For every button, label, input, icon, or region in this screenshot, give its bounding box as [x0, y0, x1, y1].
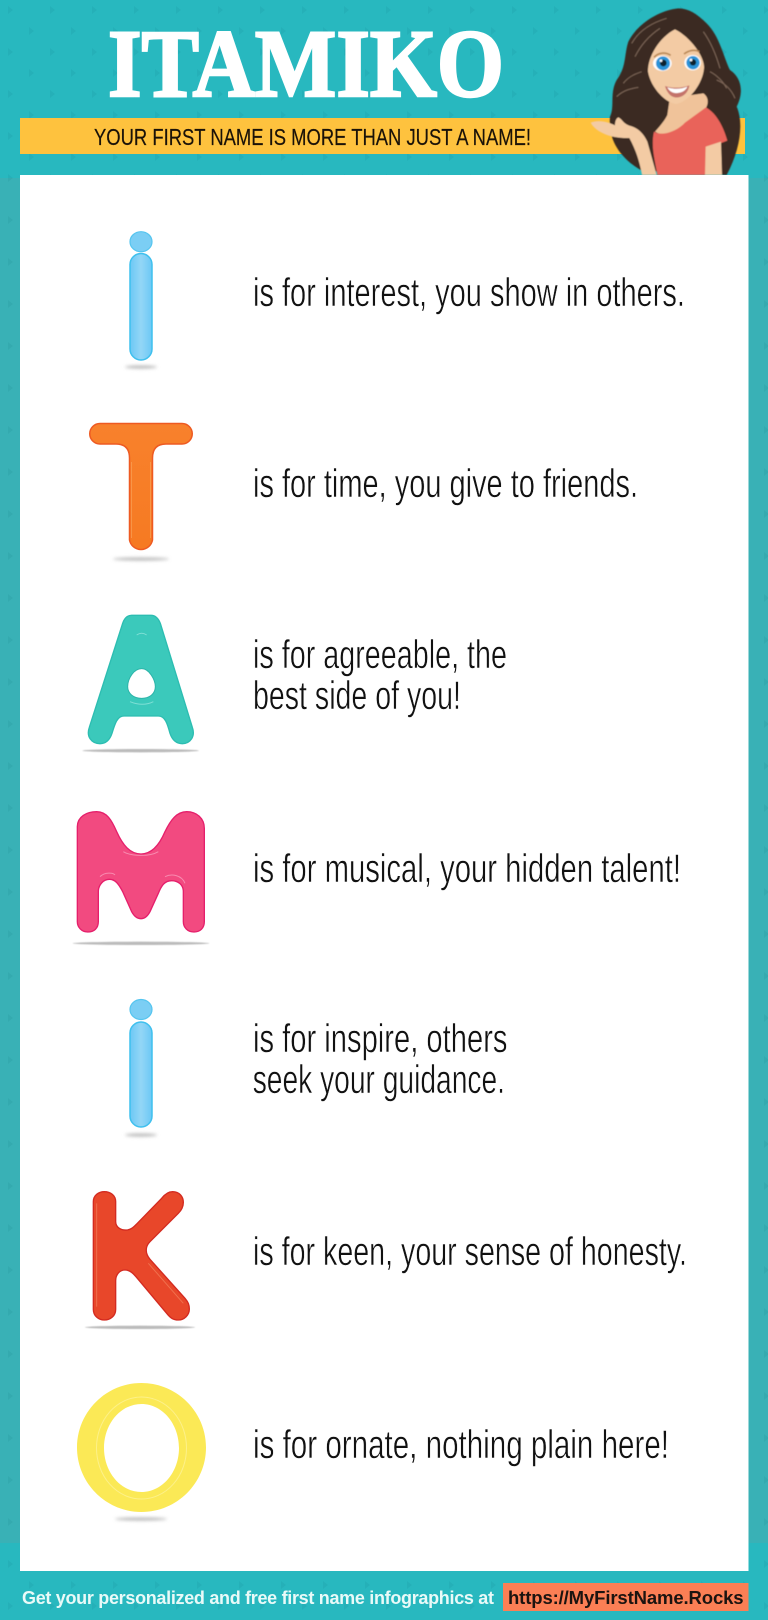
letter O [77, 1383, 206, 1521]
mouth [665, 85, 689, 97]
letter A [82, 615, 199, 752]
icon: cartoon woman [591, 8, 741, 175]
letter M [73, 812, 209, 945]
text: I second: seek your guidance. [253, 1058, 505, 1102]
text: A: is for agreeable, the [253, 633, 507, 677]
letter I (first) [125, 232, 157, 369]
letter K [85, 1192, 195, 1329]
text: I second: is for inspire, others [253, 1017, 508, 1061]
subtitle banner [20, 118, 745, 154]
title: ITAMIKO [108, 10, 504, 117]
arm and hand [591, 117, 657, 175]
face [648, 29, 704, 104]
text: A [253, 633, 507, 718]
footer call to action: Get your personalized and free first name infographics at [22, 1588, 494, 1608]
eyes [653, 56, 672, 71]
neck [655, 93, 708, 140]
letter T [90, 424, 192, 561]
footer url badge: https://MyFirstName.Rocks [508, 1587, 744, 1608]
shirt [653, 107, 727, 175]
text: I second [253, 1017, 508, 1102]
subtitle banner: YOUR FIRST NAME IS MORE THAN JUST A NAME! [94, 124, 531, 150]
text: A: best side of you! [253, 674, 461, 718]
letter I (second) [125, 1000, 157, 1137]
